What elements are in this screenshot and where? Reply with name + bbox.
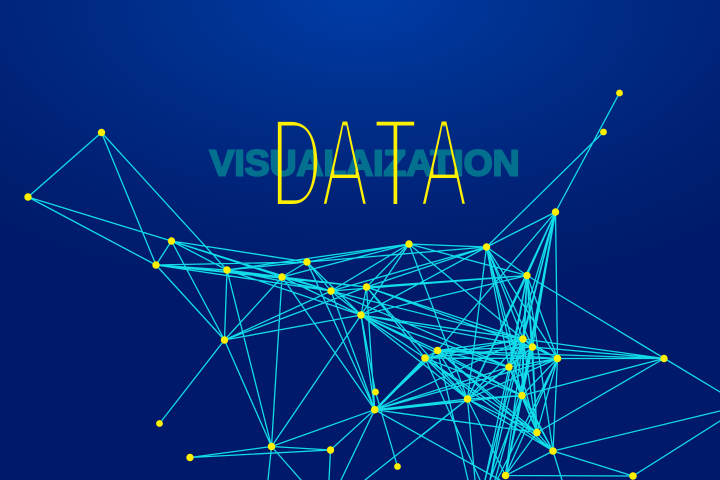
top and far right edges — [420, 93, 720, 480]
title: DATA: DATA — [270, 91, 468, 234]
middle edges — [227, 244, 558, 480]
lower left edges — [190, 392, 500, 480]
network edges — [28, 93, 720, 480]
left cluster edges — [28, 132, 486, 446]
subtitle: VISUALAIZATION: VISUALAIZATION — [210, 142, 520, 183]
dense right cluster edges — [375, 339, 664, 480]
network nodes — [24, 90, 668, 480]
